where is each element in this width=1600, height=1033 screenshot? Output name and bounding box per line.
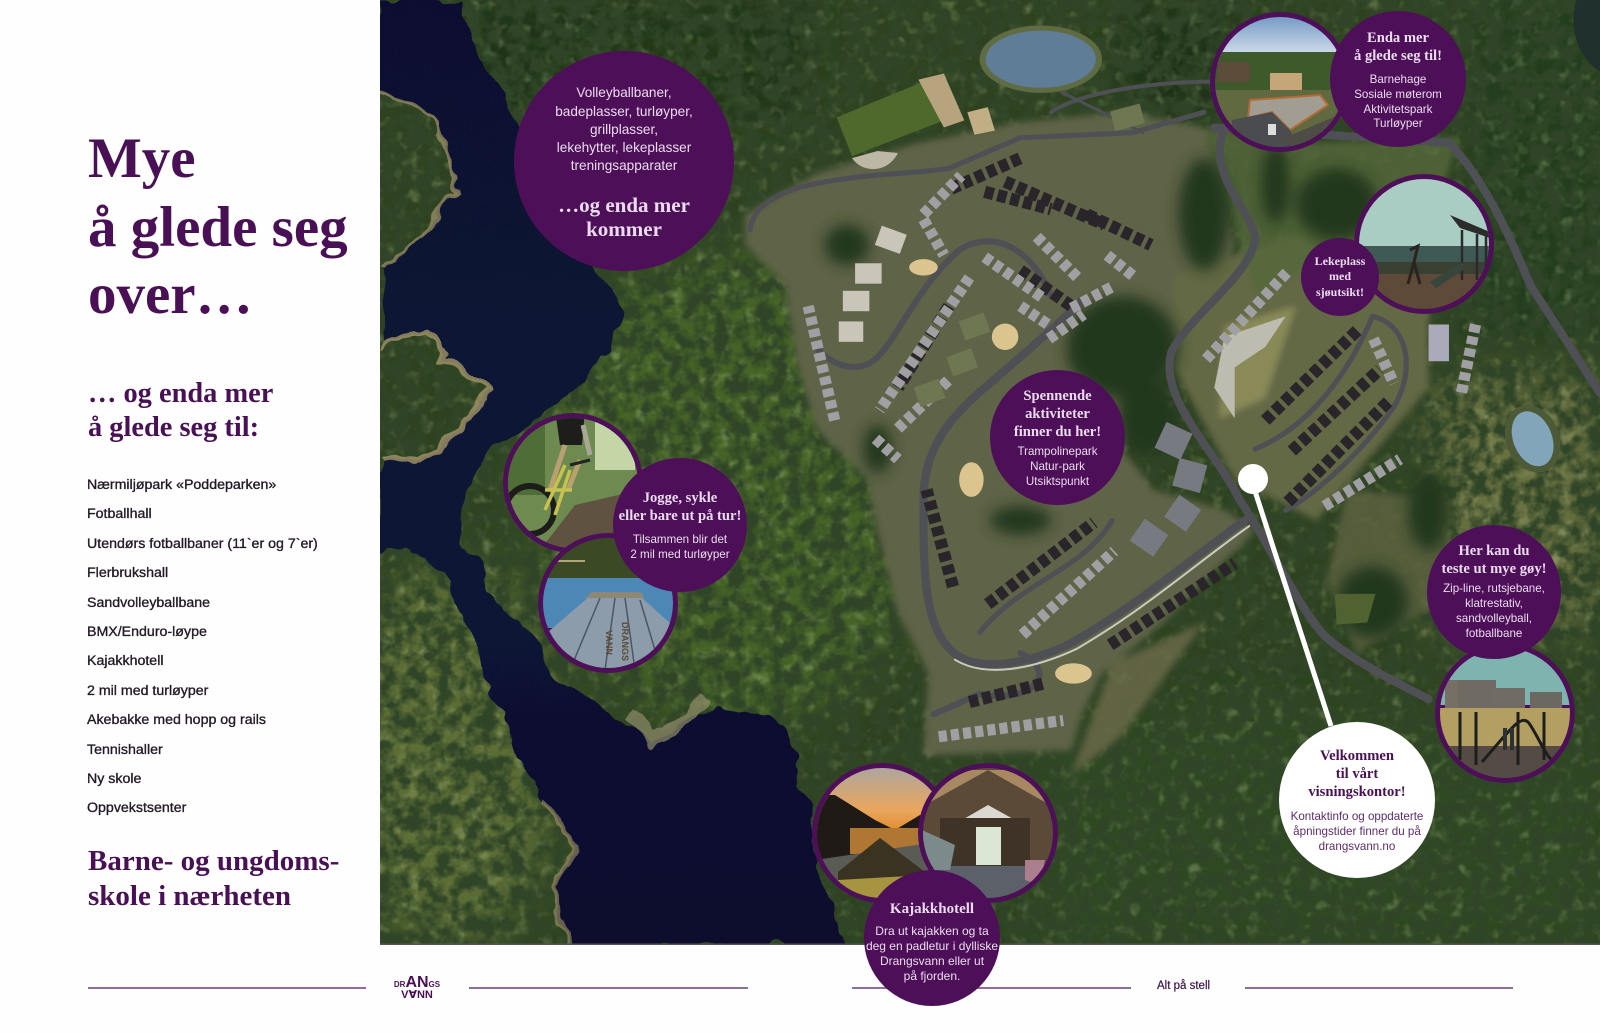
callout: activities overview: treningsapparater xyxy=(571,158,677,173)
callout: activities overview: grillplasser, xyxy=(590,122,658,137)
callout: activities overview: badeplasser, turløyper, xyxy=(555,104,693,119)
white bubble: til vårt xyxy=(1336,766,1378,782)
pointer marker xyxy=(1238,464,1334,727)
text bubble xyxy=(1301,238,1379,316)
text bubble: å glede seg til! xyxy=(1354,48,1442,64)
callout: spennende aktiviteter: aktiviteter xyxy=(1025,406,1090,422)
text bubble: eller bare ut på tur! xyxy=(619,508,741,524)
tree patches in settlement xyxy=(824,143,1449,638)
list of amenities: Oppvekstsenter xyxy=(87,800,186,816)
callout: spennende aktiviteter: Spennende xyxy=(1023,388,1092,404)
text bubble: deg en padletur i dylliske xyxy=(866,938,998,952)
list of amenities: Nærmiljøpark «Poddeparken» xyxy=(87,477,276,493)
photos: kayak and boathouse xyxy=(812,763,1058,903)
text bubble: klatrestativ, xyxy=(1465,597,1523,610)
title: over… xyxy=(88,263,253,326)
white bubble: drangsvann.no xyxy=(1319,840,1395,852)
callout: lekeplass med sjøutsikt xyxy=(1301,174,1494,316)
text bubble: 2 mil med turløyper xyxy=(630,548,730,560)
list of amenities: Tennishaller xyxy=(87,742,163,758)
list of amenities: Utendørs fotballbaner (11`er og 7`er) xyxy=(87,536,318,552)
text bubble: sjøutsikt! xyxy=(1316,285,1364,299)
title: Mye xyxy=(88,127,196,190)
logo: Drangsvann: DRANGS xyxy=(394,974,441,991)
text bubble: Dra ut kajakken og ta xyxy=(875,924,989,938)
list of amenities: Kajakkhotell xyxy=(87,653,164,669)
white bubble: visningskontor! xyxy=(1308,784,1406,800)
callout: jogge, sykle xyxy=(503,413,747,673)
white bubble: Velkommen xyxy=(1320,748,1394,764)
photo: climbing frame xyxy=(1435,648,1575,783)
photo: mountain bike rider: VANN xyxy=(604,630,614,655)
settlement land xyxy=(745,112,1459,776)
title xyxy=(88,127,348,326)
callout: her kan du teste xyxy=(1427,525,1575,783)
text bubble: Jogge, sykle xyxy=(643,490,717,506)
photo: neighbourhood rendering xyxy=(1210,12,1341,152)
text bubble xyxy=(1330,11,1466,147)
school heading: Barne- og ungdoms- xyxy=(88,845,339,877)
callout: enda mer å glede seg til xyxy=(1210,11,1466,152)
list of amenities: Flerbrukshall xyxy=(87,565,168,581)
callout: spennende aktiviteter xyxy=(990,370,1125,505)
photo: playground xyxy=(1354,174,1494,314)
text bubble: Tilsammen blir det xyxy=(633,532,727,546)
school heading xyxy=(88,845,339,912)
logo: Drangsvann xyxy=(394,974,441,1001)
footer rule: right xyxy=(1245,987,1513,989)
callout: activities overview: Volleyballbaner, xyxy=(576,85,672,100)
text bubble: Kajakkhotell xyxy=(890,900,974,916)
callout: activities overview: lekehytter, lekeplasser xyxy=(557,140,691,155)
text bubble xyxy=(1427,525,1561,659)
text bubble: Zip-line, rutsjebane, xyxy=(1443,582,1545,595)
field near right xyxy=(1335,594,1375,624)
photo: mountain bike rider: DRANGS xyxy=(620,622,630,661)
list of amenities: Fotballhall xyxy=(87,506,152,522)
callout: spennende aktiviteter: Trampolinepark xyxy=(1017,444,1098,458)
roads xyxy=(750,82,1600,714)
map bottom edge xyxy=(380,944,1600,945)
subheading xyxy=(88,378,273,443)
sports field xyxy=(837,82,944,156)
footer rule: left xyxy=(88,987,366,989)
text bubble: Her kan du xyxy=(1458,543,1530,559)
white bubble: Kontaktinfo og oppdaterte xyxy=(1291,810,1423,822)
callout: kajakkhotell xyxy=(812,763,1058,1006)
footer rule: centre left xyxy=(469,987,748,989)
callout: activities overview: …og enda mer xyxy=(558,193,690,217)
text bubble: Aktivitetspark xyxy=(1364,102,1432,116)
text bubble: Sosiale møterom xyxy=(1354,88,1442,101)
white bubble xyxy=(1279,722,1435,878)
text bubble: Lekeplass xyxy=(1315,254,1365,268)
text bubble xyxy=(613,458,747,592)
panel: left text column xyxy=(86,127,348,912)
houses xyxy=(808,104,1475,737)
logo: Drangsvann: V∀NN xyxy=(401,989,433,1001)
text bubble xyxy=(864,870,1000,1006)
lake water xyxy=(381,0,847,946)
title: å glede seg xyxy=(88,196,348,259)
text bubble: Barnehage xyxy=(1370,73,1426,86)
list of amenities: BMX/Enduro-løype xyxy=(87,624,207,640)
callout: spennende aktiviteter: Utsiktspunkt xyxy=(1026,474,1089,488)
aerial site map xyxy=(380,0,1600,945)
school heading: skole i nærheten xyxy=(88,880,291,912)
list of amenities: Akebakke med hopp og rails xyxy=(87,712,266,728)
callout: spennende aktiviteter: Natur-park xyxy=(1030,460,1085,472)
photo: mountain bike rider xyxy=(503,413,678,673)
base forest xyxy=(380,0,1600,946)
text bubble: fotballbane xyxy=(1466,627,1522,640)
list of amenities xyxy=(86,477,318,816)
text bubble: på fjorden. xyxy=(904,968,960,982)
list of amenities: 2 mil med turløyper xyxy=(87,683,208,699)
list of amenities: Ny skole xyxy=(87,771,141,787)
list of amenities: Sandvolleyballbane xyxy=(87,595,210,611)
subheading: … og enda mer xyxy=(88,378,273,409)
footer text: Alt på stell: Alt på stell xyxy=(1157,980,1210,992)
footer rule: centre right xyxy=(852,987,1131,989)
text bubble: med xyxy=(1329,269,1351,283)
callout: activities overview: kommer xyxy=(586,217,662,241)
callout: spennende aktiviteter: finner du her! xyxy=(1014,424,1101,440)
ponds xyxy=(980,26,1102,93)
text bubble: sandvolleyball, xyxy=(1456,612,1532,625)
text bubble: Drangsvann eller ut xyxy=(880,954,984,968)
text bubble: Turløyper xyxy=(1373,117,1423,130)
callout: visningskontor with pointer xyxy=(1238,464,1435,878)
subheading: å glede seg til: xyxy=(88,412,259,443)
white bubble: åpningstider finner du på xyxy=(1293,824,1421,838)
callout: activities overview xyxy=(514,51,734,271)
text bubble: teste ut mye gøy! xyxy=(1442,561,1546,577)
text bubble: Enda mer xyxy=(1367,30,1429,46)
